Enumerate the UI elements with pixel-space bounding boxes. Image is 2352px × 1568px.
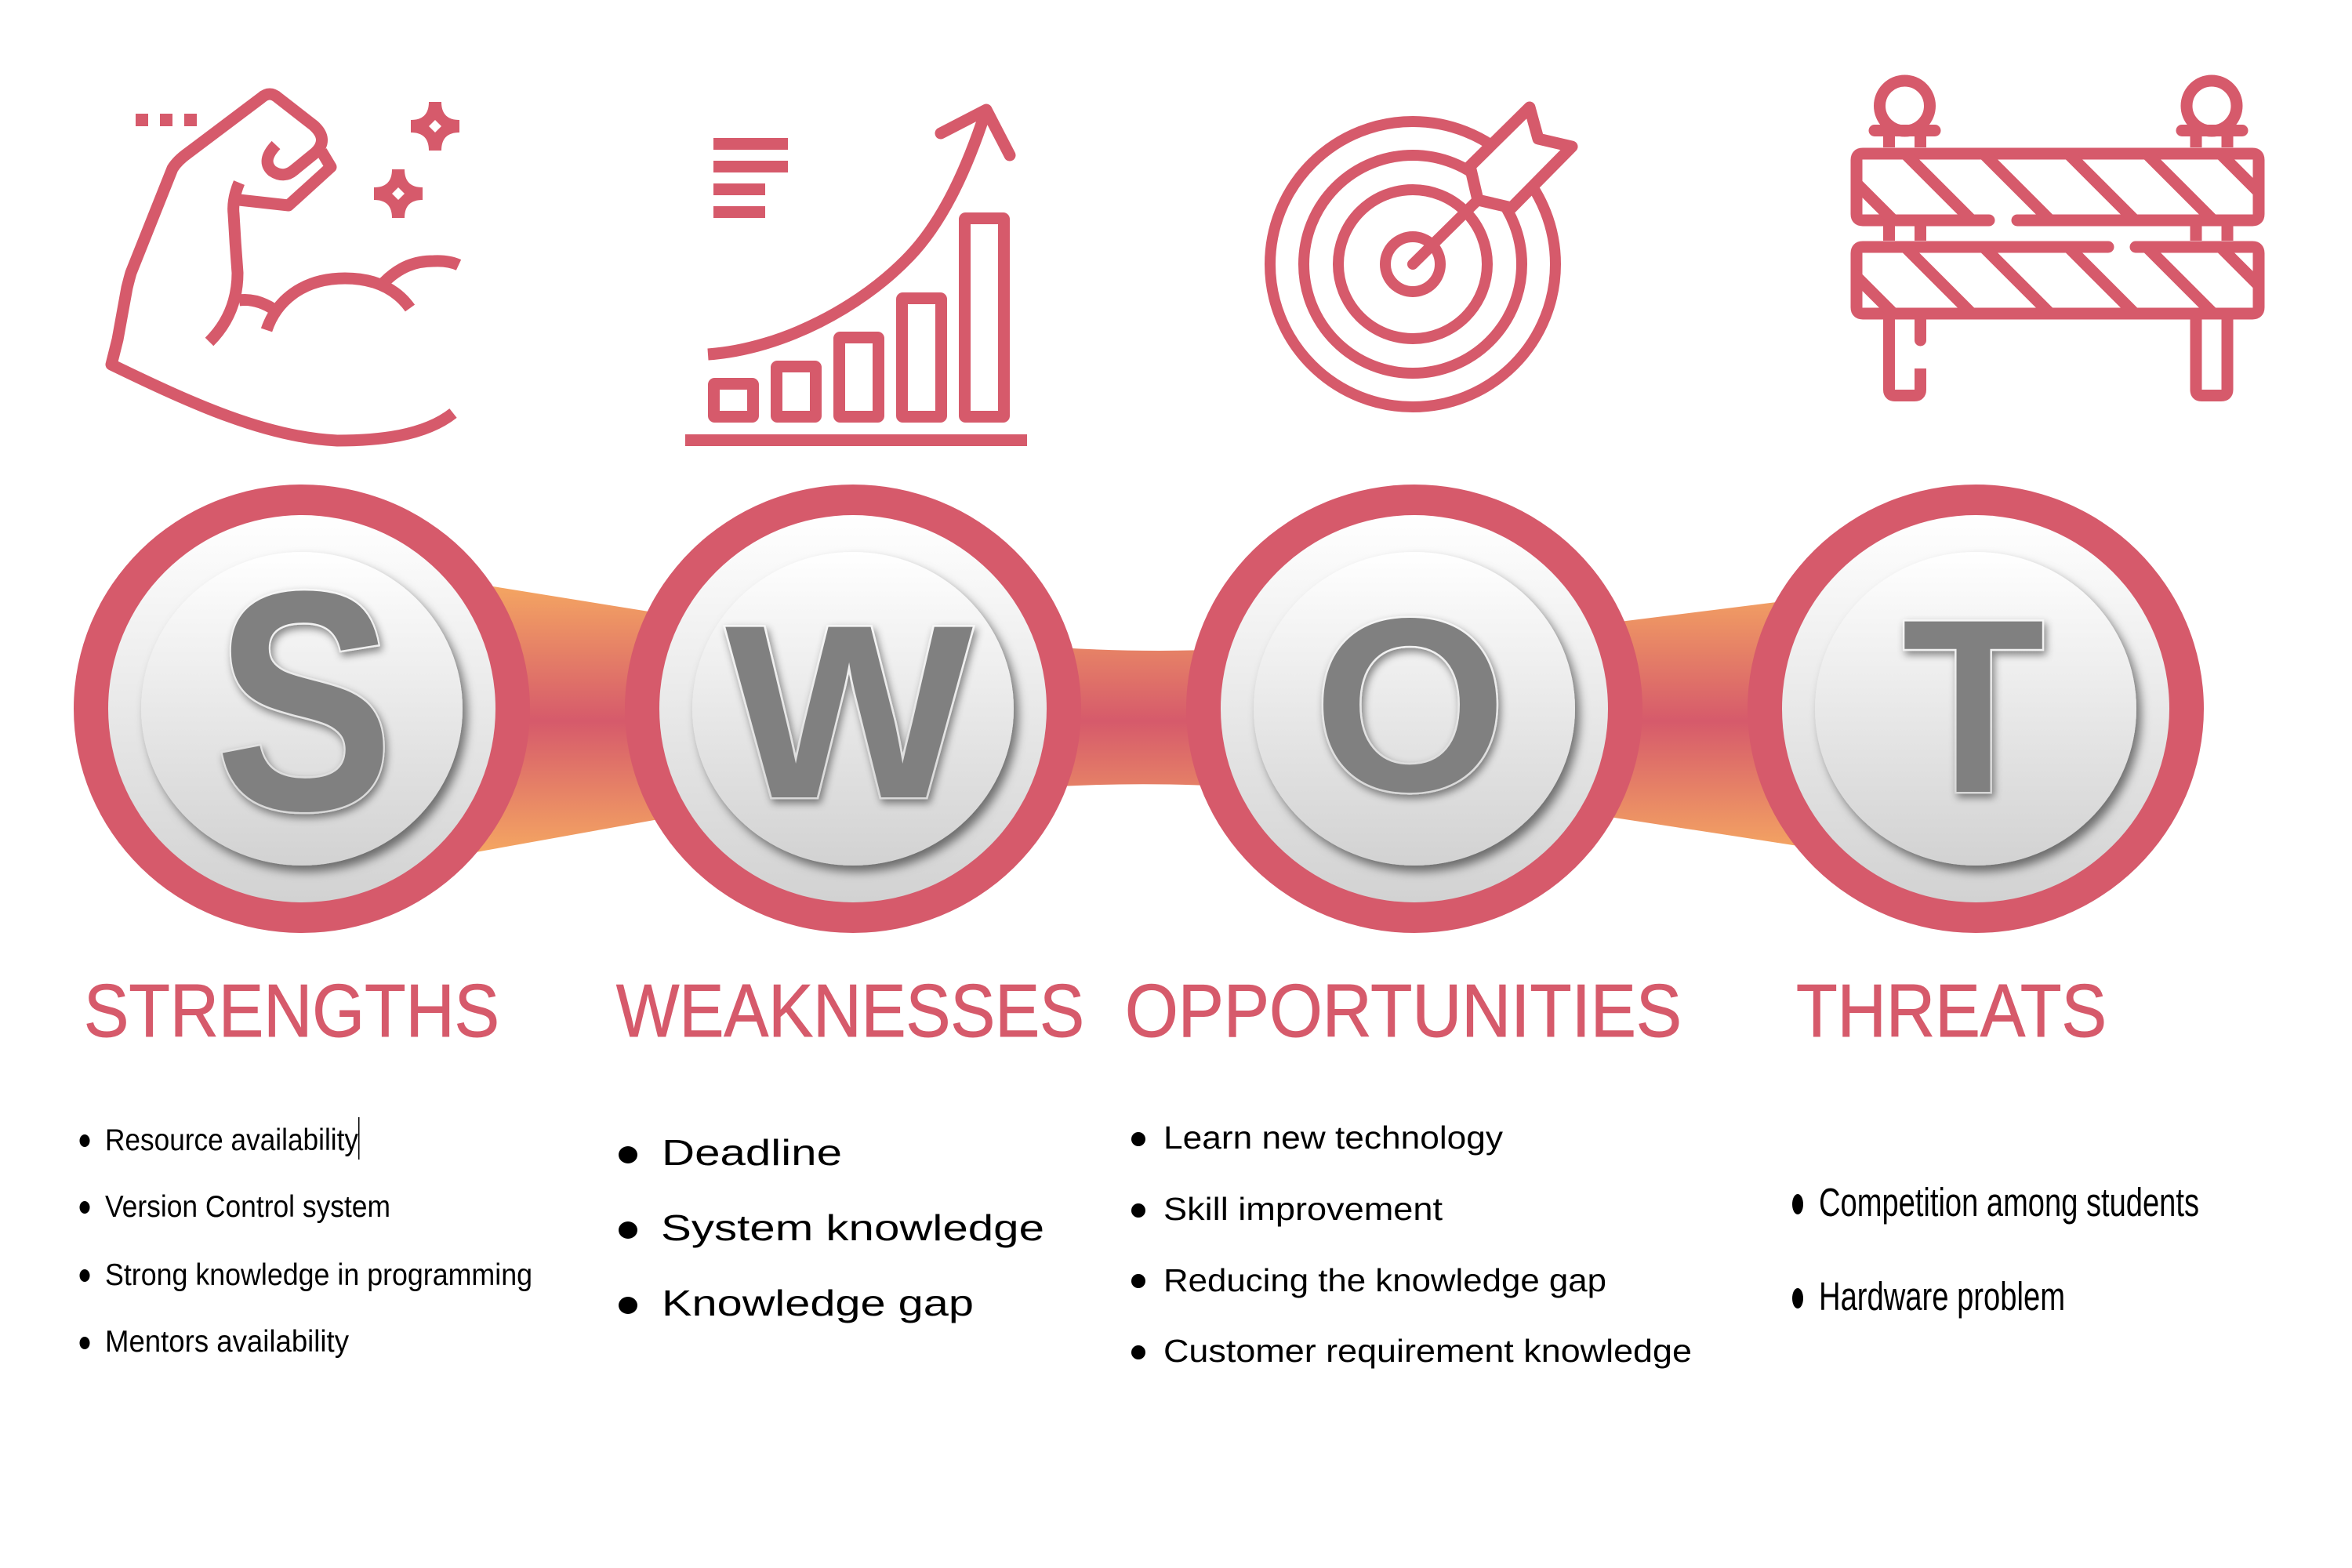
badge: W bbox=[625, 485, 1081, 933]
list: threats bbox=[1792, 1180, 2199, 1319]
list: weaknesses bbox=[619, 1132, 1044, 1323]
heading: threats: THREATS bbox=[1796, 969, 2107, 1053]
list: weaknesses: System knowledge bbox=[661, 1207, 1044, 1248]
icon: target with arrow bbox=[1270, 107, 1572, 407]
icon: flexed arm bbox=[111, 94, 459, 441]
heading: strengths: STRENGTHS bbox=[84, 969, 499, 1053]
list: threats: Competition among students bbox=[1819, 1180, 2199, 1225]
list: opportunities: Customer requirement knowledge bbox=[1163, 1333, 1692, 1369]
badge: S: S bbox=[215, 526, 394, 876]
badge: T bbox=[1748, 485, 2204, 933]
heading: weaknesses: WEAKNESSES bbox=[616, 969, 1084, 1053]
list: opportunities: Reducing the knowledge gap bbox=[1163, 1262, 1606, 1298]
badge: O bbox=[1186, 485, 1642, 933]
badge: S bbox=[74, 485, 530, 933]
badge: T: T bbox=[1902, 568, 2045, 844]
list: opportunities: Skill improvement bbox=[1163, 1191, 1443, 1227]
list: strengths: Resource availability bbox=[105, 1123, 358, 1157]
icon: growth bar chart bbox=[685, 110, 1027, 446]
list: weaknesses: Deadline bbox=[662, 1132, 842, 1173]
heading: opportunities: OPPORTUNITIES bbox=[1125, 969, 1682, 1053]
connector: opportunities to threats bbox=[1599, 600, 1803, 847]
list: threats: Hardware problem bbox=[1819, 1274, 2065, 1319]
connector: strengths to weaknesses bbox=[463, 584, 659, 855]
badge: O: O bbox=[1313, 567, 1507, 843]
list: strengths: Mentors availability bbox=[105, 1325, 349, 1359]
badge: W: W bbox=[725, 573, 975, 850]
list: opportunities: Learn new technology bbox=[1163, 1120, 1504, 1156]
list: strengths bbox=[80, 1117, 532, 1359]
icon: road barrier bbox=[1827, 81, 2287, 395]
list: strengths: Strong knowledge in programming bbox=[105, 1258, 532, 1292]
list: strengths: Version Control system bbox=[105, 1190, 390, 1224]
list: opportunities bbox=[1131, 1120, 1692, 1369]
list: weaknesses: Knowledge gap bbox=[662, 1283, 974, 1323]
connector: weaknesses to opportunities bbox=[1058, 648, 1207, 786]
